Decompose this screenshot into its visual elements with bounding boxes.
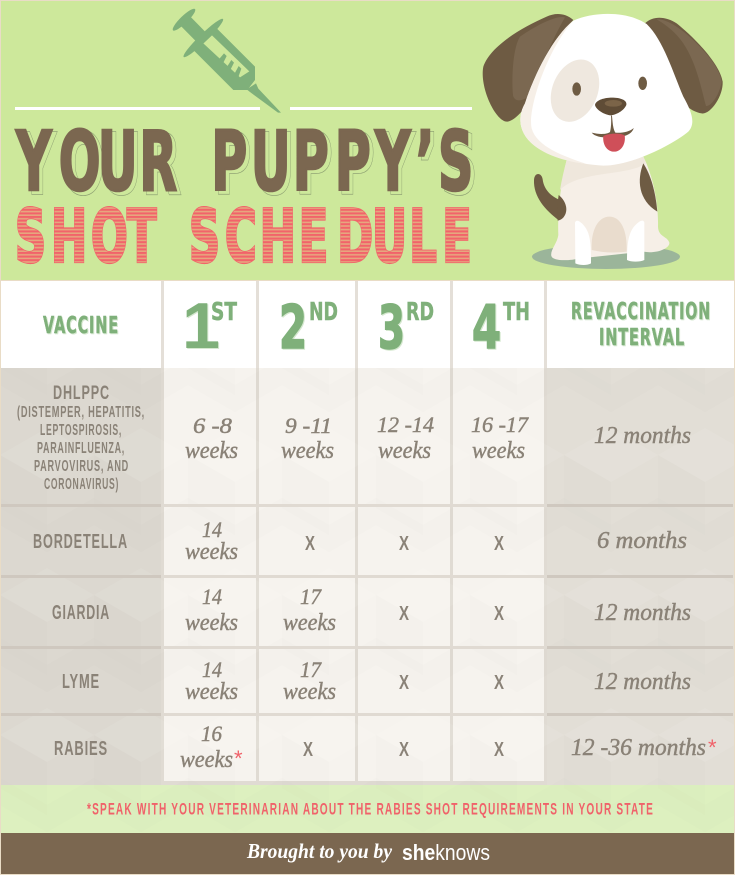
heading: 1st: 1: [182, 289, 220, 362]
table body backgrounds: [1, 281, 734, 785]
heading: 3rd: RD: [406, 297, 434, 326]
eye patch: [542, 52, 608, 129]
heading: 4th: TH: [503, 297, 530, 326]
dose 2: weeks: [281, 438, 334, 464]
row: dhlppc: [17, 383, 691, 493]
illustration: puppy: [483, 14, 723, 269]
title line: your puppy's: YOUR PUPPY’S: [15, 114, 473, 209]
heading: vaccine: [43, 313, 120, 340]
head: [520, 14, 692, 166]
hip spot: [557, 195, 566, 221]
vaccine name: bordetella: BORDETELLA: [33, 531, 128, 553]
dose 2 to 4: X: [494, 533, 504, 555]
dose 2: weeks: [283, 679, 336, 705]
footnote band: [1, 785, 734, 833]
dose 1: weeks: [185, 438, 238, 464]
vaccine name: giardia: GIARDIA: [52, 602, 110, 624]
heading: revaccination interval: INTERVAL: [600, 326, 686, 352]
dose 2: 17: [300, 657, 322, 682]
dose 1: [185, 657, 238, 705]
dose 1: 14: [202, 517, 222, 542]
dose 4: [471, 412, 529, 464]
heading: 1st: [182, 289, 237, 363]
dose 3 and 4: [399, 672, 504, 694]
dose 1: 6 -8: [193, 413, 232, 438]
interval: 6 months: [597, 528, 687, 554]
table header row: [1, 281, 734, 368]
dose 1: [180, 721, 243, 773]
mouth: [592, 115, 634, 138]
interval: *: [708, 735, 717, 760]
vaccine name: dhlppc: PARAINFLUENZA,: [37, 440, 125, 457]
dose 2 to 4: [303, 739, 504, 761]
vaccine name: dhlppc: PARVOVIRUS, AND: [34, 458, 129, 475]
dose 2 to 4: X: [399, 533, 409, 555]
dose 2: 9 -11: [285, 413, 332, 438]
title line: shot schedule: SHOT SCHEDULE: [15, 196, 472, 280]
dose 1: [185, 517, 238, 565]
eyes: [572, 82, 581, 96]
vaccine name: dhlppc: (DISTEMPER, HEPATITIS,: [17, 404, 145, 421]
dose 2 to 4: X: [305, 533, 315, 555]
dose 3: weeks: [378, 438, 431, 464]
dose 1: weeks: [185, 539, 238, 565]
dose 2: [283, 584, 336, 636]
heading: revaccination interval: INTERVAL: [599, 325, 685, 351]
dose 2: weeks: [283, 610, 336, 636]
belly: [592, 217, 627, 252]
dose 1: [185, 584, 238, 636]
dose 3 and 4: X: [399, 603, 409, 625]
dose 1: *: [234, 746, 243, 771]
header panel: [1, 1, 734, 280]
dose 3: [377, 412, 434, 464]
dose 1: 14: [202, 657, 222, 682]
dose 4: weeks: [472, 438, 525, 464]
vaccine name: dhlppc: DHLPPC: [53, 383, 110, 404]
title: [15, 114, 477, 280]
heading: 3rd: 3: [379, 294, 406, 364]
dose 3 and 4: X: [494, 603, 504, 625]
left ear: [483, 14, 573, 122]
vaccine name: dhlppc: CORONAVIRUS): [44, 476, 119, 493]
title line: your puppy's: YOUR PUPPY’S: [19, 117, 477, 212]
vaccine name: lyme: LYME: [62, 671, 100, 693]
dose 1: [185, 413, 238, 464]
heading: vaccine: VACCINE: [44, 314, 120, 340]
heading: 2nd: [279, 293, 338, 364]
dose 2: [283, 657, 336, 705]
dose 1: weeks: [185, 610, 238, 636]
row: bordetella: [33, 517, 687, 565]
tail: [534, 174, 560, 221]
heading: 2nd: ND: [309, 297, 338, 326]
dose 2 to 4: X: [399, 739, 409, 761]
dose 3 and 4: [399, 603, 504, 625]
heading: 3rd: 3: [378, 293, 405, 363]
heading: 4th: 4: [473, 294, 502, 364]
row: lyme: [62, 657, 691, 705]
heading: 1st: ST: [211, 297, 237, 326]
tongue: [603, 134, 625, 152]
interval: 12 months: [594, 600, 691, 626]
heading: 2nd: 2: [279, 293, 307, 363]
vaccine name: dhlppc: [17, 383, 145, 493]
dose 1: weeks: [185, 679, 238, 705]
dose 2: 17: [300, 584, 322, 609]
dose 3: 12 -14: [377, 412, 434, 437]
heading: vaccine: VACCINE: [43, 313, 119, 339]
logo: sheknows: sheknows: [402, 840, 490, 865]
shoulder spot: [640, 163, 657, 212]
dose 3 and 4: X: [494, 672, 504, 694]
heading: 1st: 1: [183, 290, 221, 363]
interval: 12 -36 months: [571, 735, 706, 761]
heading: 2nd: 2: [280, 294, 308, 364]
vaccine name: rabies: RABIES: [54, 738, 108, 760]
dose 1: 16: [201, 721, 222, 746]
row: giardia: [52, 584, 691, 636]
footer band: [1, 833, 734, 874]
row: rabies: [54, 721, 717, 773]
credit text: Brought to you by: [246, 839, 393, 863]
dose 2 to 4: [305, 533, 504, 555]
ground shadow: [532, 244, 680, 269]
chest shade: [560, 157, 646, 190]
nose: [595, 98, 626, 115]
front legs: [575, 221, 591, 265]
dose 1: 14: [202, 584, 222, 609]
title line: your puppy's: YOUR PUPPY’S: [19, 117, 477, 212]
right ear: [645, 18, 723, 113]
head shade: [520, 21, 587, 164]
divider lines: [15, 107, 472, 110]
heading: 4th: 4: [472, 293, 501, 363]
title line: shot schedule: SHOT SCHEDULE: [15, 196, 472, 280]
vaccine name: dhlppc: LEPTOSPIROSIS,: [40, 422, 122, 439]
body: [551, 157, 669, 260]
interval: 12 months: [594, 423, 691, 449]
dose 4: 16 -17: [471, 412, 529, 437]
icon: syringe: [170, 6, 281, 113]
dose 2 to 4: X: [494, 739, 504, 761]
interval: 12 months: [594, 669, 691, 695]
dose 3 and 4: X: [399, 672, 409, 694]
dose 1: weeks: [180, 747, 233, 773]
heading: revaccination interval: [571, 299, 712, 352]
dose 2 to 4: X: [303, 739, 313, 761]
dose 2: [281, 413, 334, 464]
